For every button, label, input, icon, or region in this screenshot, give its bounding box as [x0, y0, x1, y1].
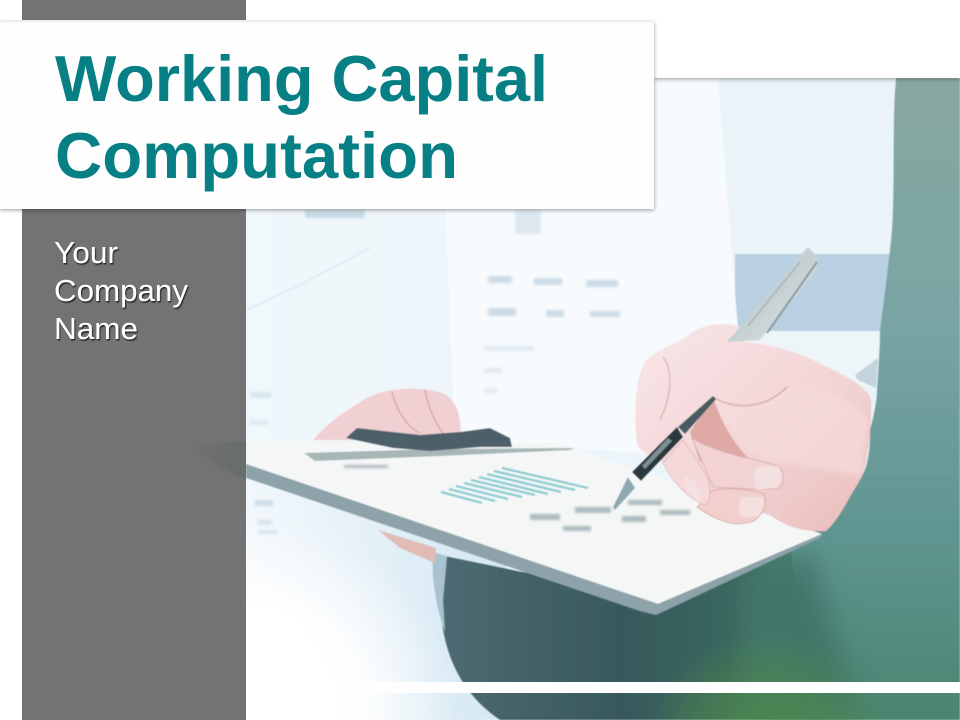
tablet: small printed figures [344, 465, 690, 531]
photo: lower page, pale blue fade [347, 513, 506, 720]
left hand [313, 389, 460, 440]
top white strip [654, 0, 960, 78]
tablet: stripe chart [441, 468, 588, 503]
photo: white corner fade [246, 531, 432, 720]
shirt cuff [433, 552, 447, 632]
company name: Name [54, 311, 138, 346]
sleeve: soft seam [750, 550, 860, 720]
sleeve: green glow at bottom [666, 653, 870, 720]
tablet: side edge [246, 464, 822, 615]
hand: thumb crease [713, 387, 787, 406]
hand: inner shadow between fingers [690, 400, 748, 462]
company name: Your [54, 235, 118, 270]
tablet: header bar [304, 448, 575, 461]
hand: shaded palm [791, 408, 866, 476]
photo: blurred figures on paper [250, 210, 620, 425]
shirt cuff at wrist [855, 358, 878, 388]
lower hand under tablet [378, 530, 436, 563]
title: Working Capital [55, 42, 548, 115]
title: Computation [55, 119, 458, 192]
wallet [346, 428, 512, 451]
pen: highlight [642, 438, 672, 469]
left hand: finger lines [392, 390, 446, 437]
photo: window [716, 78, 901, 256]
tablet shadow across grey column [190, 441, 246, 480]
title panel [0, 22, 654, 209]
tablet: top surface [303, 450, 822, 604]
hand: knuckle crease [660, 357, 670, 420]
photo: blue band behind hand [735, 254, 895, 332]
pen: stripe [748, 262, 800, 326]
company name: Company [54, 273, 188, 308]
pen: black grip [632, 427, 683, 481]
bottom white strip [371, 682, 960, 693]
forearm sleeve under tablet [436, 551, 810, 720]
tablet [246, 441, 822, 615]
pen: silver barrel [727, 247, 818, 342]
hand: fingernails [754, 466, 781, 490]
hand: index finger [663, 440, 710, 505]
photo: faint line chart [246, 248, 370, 310]
pen: silver nib [613, 477, 635, 510]
pen: clip shadow [767, 262, 817, 333]
sleeve, right side [822, 78, 960, 534]
grey column [22, 0, 246, 720]
pen: metal shaft [678, 396, 716, 434]
hand: palm and back [635, 324, 871, 531]
right hand with pen [613, 247, 871, 531]
hand: middle finger [692, 438, 784, 489]
photo: paper sheet behind [440, 78, 740, 460]
background photo: office scene [246, 78, 960, 720]
photo: pale desk behind hand [769, 330, 880, 333]
photo: figures on lower page [255, 500, 278, 534]
lower right sleeve [791, 530, 960, 720]
hand: ring finger [697, 489, 766, 524]
